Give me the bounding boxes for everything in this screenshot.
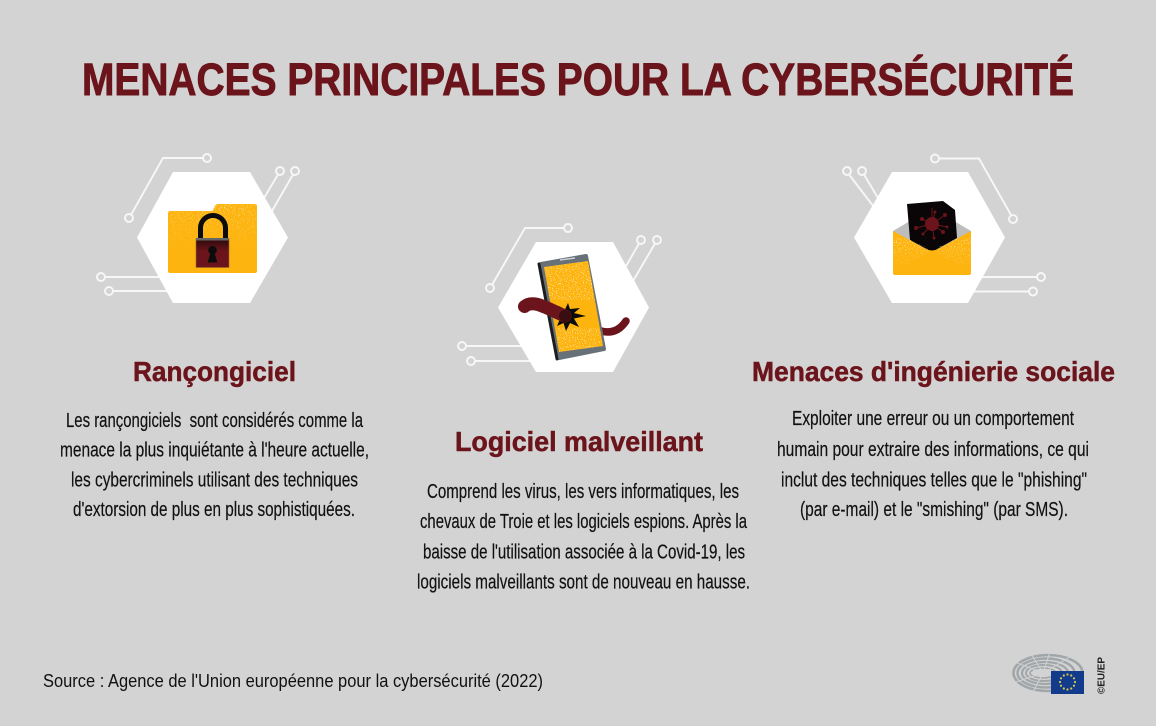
heading: Rançongiciel: Rançongiciel xyxy=(133,356,296,387)
heading: Menaces d'ingénierie sociale: Menaces d'ingénierie sociale xyxy=(752,356,1115,387)
copyright label: ©EU/EP xyxy=(1096,657,1108,694)
panel: ransomware xyxy=(60,154,369,521)
icon: white hexagon xyxy=(498,242,649,372)
heading: Logiciel malveillant: Logiciel malveillant xyxy=(455,426,703,457)
logo: European Parliament hemicycle and EU flag xyxy=(1010,652,1084,694)
source note: Source : Agence de l'Union européenne pour la cybersécurité (2022) xyxy=(43,671,543,691)
icon: white hexagon xyxy=(854,172,1005,303)
text: social engineering description xyxy=(777,408,1089,521)
text: social engineering description: Exploiter une erreur ou un comportement xyxy=(792,408,1074,430)
icon: circuit lines ransomware xyxy=(97,154,299,295)
text: malware description: chevaux de Troie et les logiciels espions. Après la xyxy=(420,511,748,533)
text: social engineering description: (par e-mail) et le "smishing" (par SMS). xyxy=(800,499,1068,521)
icon: white hexagon xyxy=(137,172,288,303)
panel: malware xyxy=(417,224,750,594)
text: malware description: logiciels malveillants sont de nouveau en hausse. xyxy=(417,572,750,594)
icon: envelope with virus document xyxy=(893,201,972,275)
icon: yellow folder with padlock xyxy=(168,204,257,273)
text: ransomware description: les cybercriminels utilisant des techniques xyxy=(71,470,358,492)
icon: circuit lines malware xyxy=(458,224,661,365)
icon: circuit lines social engineering xyxy=(843,154,1045,296)
text: ransomware description: Les rançongiciels sont considérés comme la xyxy=(66,410,364,432)
panel: social engineering xyxy=(752,154,1115,521)
text: ransomware description xyxy=(60,410,369,521)
icon: phone with worm xyxy=(524,256,626,359)
text: malware description xyxy=(417,481,750,594)
text: ransomware description: d'extorsion de plus en plus sophistiquées. xyxy=(73,499,355,521)
text: malware description: Comprend les virus, les vers informatiques, les xyxy=(427,481,739,503)
text: ransomware description: menace la plus inquiétante à l'heure actuelle, xyxy=(60,440,369,462)
text: malware description: baisse de l'utilisation associée à la Covid-19, les xyxy=(423,542,745,564)
